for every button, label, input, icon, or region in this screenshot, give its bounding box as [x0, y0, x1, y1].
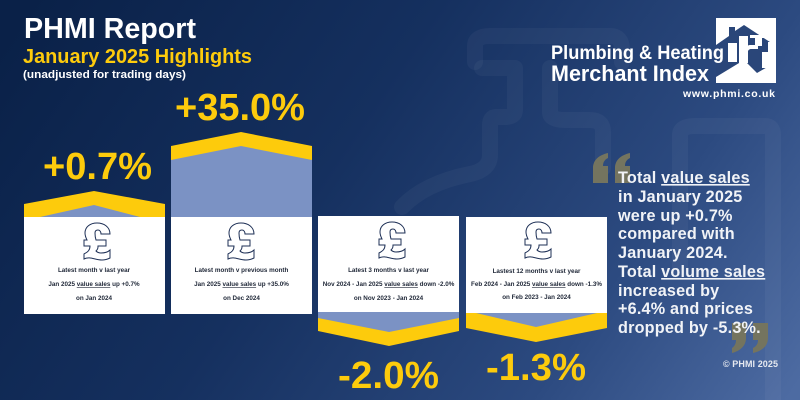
card text: Feb 2024 - Jan 2025 value sales down -1.3% — [471, 281, 602, 288]
chevron — [466, 313, 607, 342]
logo: Plumbing and Heating Merchant Index: Merchant Index — [551, 61, 710, 86]
card text — [323, 267, 455, 302]
icon: pound — [228, 223, 254, 260]
card — [466, 217, 607, 313]
heading: PHMI Report: PHMI Report — [24, 13, 197, 45]
card text: Lastest 12 months v last year — [493, 268, 581, 275]
card — [171, 217, 312, 314]
card text — [471, 268, 602, 301]
value: +35.0%: +35.0% — [175, 87, 305, 129]
panel: latest 3 months v last year — [318, 216, 459, 397]
icon: pound — [525, 222, 551, 259]
card text: Latest 3 months v last year — [348, 267, 429, 274]
card text: on Feb 2023 - Jan 2024 — [502, 294, 571, 301]
icon: opening quote — [593, 153, 630, 183]
card text: Nov 2024 - Jan 2025 value sales down -2.0% — [323, 281, 455, 288]
copyright: © PHMI 2025 — [723, 359, 778, 369]
title — [23, 13, 252, 81]
website: www.phmi.co.uk — [682, 88, 775, 100]
summary text: compared with — [618, 225, 735, 243]
panel: latest month v previous month — [171, 87, 312, 314]
card text: on Nov 2023 - Jan 2024 — [354, 295, 424, 302]
panel: latest month v last year — [24, 146, 165, 314]
card text: on Jan 2024 — [76, 295, 113, 302]
card — [24, 217, 165, 314]
summary text: were up +0.7% — [617, 207, 733, 225]
card text — [194, 267, 289, 302]
icon: pound — [84, 223, 110, 260]
logo: Plumbing and Heating Merchant Index — [551, 18, 776, 100]
card text: Jan 2025 value sales up +35.0% — [194, 281, 289, 288]
summary text: Total value sales — [618, 169, 750, 187]
card text: on Dec 2024 — [223, 295, 260, 302]
summary text: increased by — [618, 282, 719, 300]
icon: house and tap — [716, 18, 776, 83]
card — [318, 216, 459, 312]
chevron — [318, 312, 459, 346]
value: -1.3%: -1.3% — [486, 347, 586, 389]
summary text — [617, 169, 765, 337]
summary text: +6.4% and prices — [618, 300, 753, 318]
note: unadjusted: (unadjusted for trading days) — [23, 69, 186, 81]
summary text: dropped by -5.3%. — [618, 319, 761, 337]
icon: pound — [379, 222, 405, 259]
value: +0.7%: +0.7% — [43, 146, 152, 188]
card text: Latest month v previous month — [195, 267, 289, 274]
card text: Latest month v last year — [58, 267, 131, 274]
chevron — [24, 191, 165, 217]
subheading: January 2025 Highlights: January 2025 Highlights — [23, 46, 252, 68]
chevron — [171, 132, 312, 217]
panel: latest 12 months v last year — [466, 217, 607, 389]
value: -2.0%: -2.0% — [338, 355, 439, 397]
summary text: in January 2025 — [618, 188, 742, 206]
card text: Jan 2025 value sales up +0.7% — [48, 281, 140, 288]
icon: closing quote — [732, 323, 768, 353]
logo text: Plumbing & Heating — [551, 43, 724, 64]
summary text: Total volume sales — [618, 263, 765, 281]
card text — [48, 267, 140, 302]
summary text: January 2024. — [618, 244, 728, 262]
